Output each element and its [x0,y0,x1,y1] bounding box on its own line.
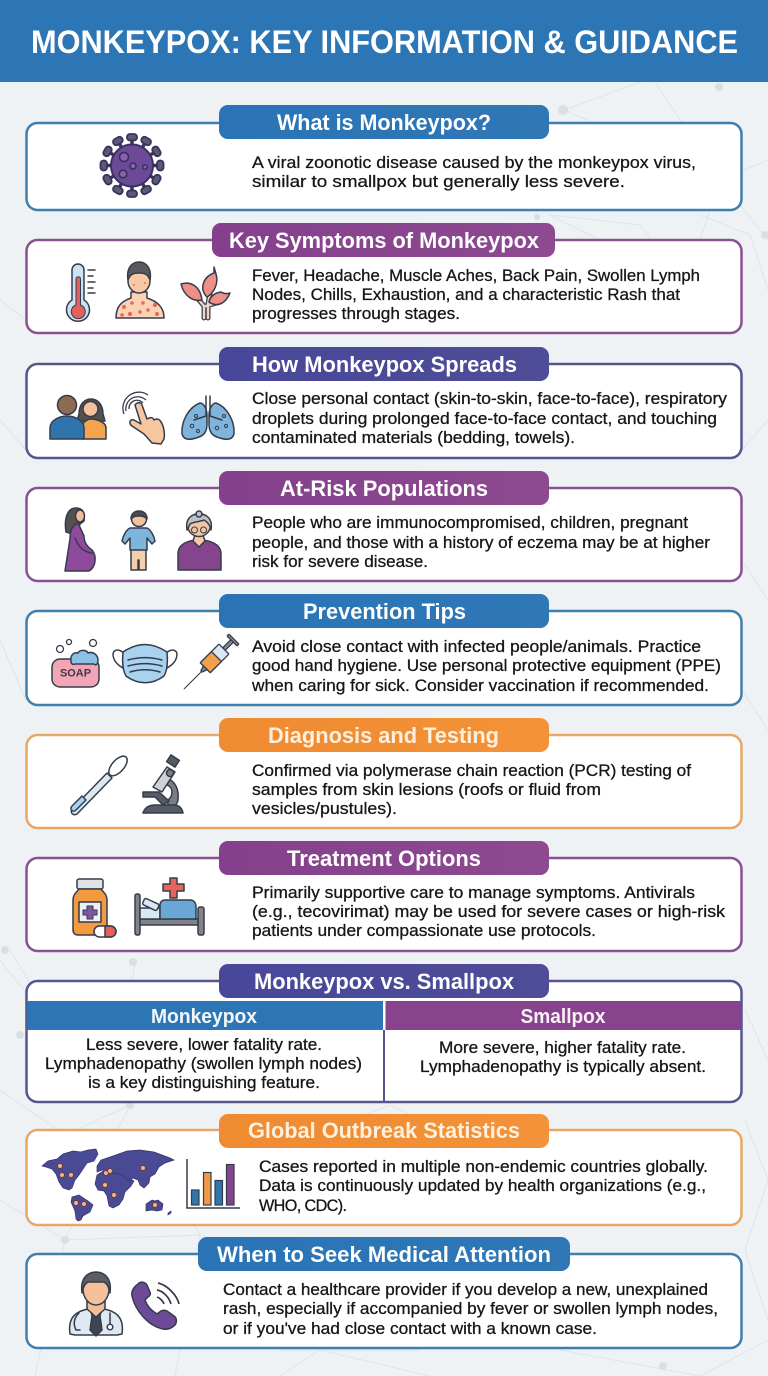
text: symptoms: Nodes, Chills, Exhaustion, and a characteristic Rash that [252,286,681,304]
text: definition: A viral zoonotic disease caused by the monkeypox virus, [252,153,696,172]
text: guidance: rash, especially if accompanied by fever or swollen lymph nodes, [223,1300,718,1318]
heading: prevention tips [219,594,549,628]
heading: how it spreads [219,347,549,381]
column: smallpox: Smallpox [520,1006,606,1028]
text: diagnosis [252,762,692,818]
icon: touching finger [123,392,164,444]
icon: doctor [70,1272,122,1336]
panel: prevention tips [26,594,742,705]
icon: pregnant person [65,508,95,571]
panel: at-risk populations [26,471,742,581]
heading: prevention tips: Prevention Tips [303,599,466,624]
heading: how it spreads: How Monkeypox Spreads [252,352,517,377]
column: smallpox: More severe, higher fatality rate. [439,1039,686,1057]
heading: what is monkeypox [219,105,549,139]
heading: global outbreak statistics [219,1114,549,1148]
icon: elderly person [178,511,221,570]
text: prevention: when caring for sick. Consider vaccination if recommended. [251,677,709,695]
text: statistics: WHO, CDC). [259,1197,347,1215]
heading: treatment options: Treatment Options [287,846,481,871]
text: at-risk groups: People who are immunocompromised, children, pregnant [252,514,689,532]
text: prevention: Avoid close contact with infected people/animals. Practice [252,638,701,656]
icon: test swab [71,753,130,815]
text: prevention: good hand hygiene. Use personal protective equipment (PPE) [252,657,721,675]
icon: virus [100,134,164,197]
icon: phone [132,1282,179,1329]
text: treatment: (e.g., tecovirimat) may be used for severe cases or high-risk [252,903,726,921]
text: treatment [252,884,726,940]
text: guidance [223,1281,718,1338]
text: statistics [259,1158,708,1215]
text: at-risk groups [252,514,711,571]
icon: soap: SOAP [60,668,91,680]
column: smallpox [386,1001,740,1076]
column: monkeypox [28,1001,383,1092]
column: monkeypox: is a key distinguishing feature. [88,1074,320,1092]
text: statistics: Cases reported in multiple non-endemic countries globally. [259,1158,708,1176]
icon: microscope [143,755,183,813]
text: guidance: Contact a healthcare provider if you develop a new, unexplained [223,1281,708,1299]
text: symptoms: Fever, Headache, Muscle Aches, Back Pain, Swollen Lymph [252,267,700,285]
icon: medicine bottle and pill [73,879,116,937]
text: statistics: Data is continuously updated by health organizations (e.g., [259,1177,706,1195]
heading: monkeypox vs smallpox: Monkeypox vs. Smallpox [254,969,515,994]
heading: when to seek medical attention [198,1237,570,1271]
text: symptoms [252,267,700,323]
panel: treatment options [26,841,742,951]
text: prevention [251,638,721,695]
heading: global outbreak statistics: Global Outbreak Statistics [248,1118,520,1143]
column: monkeypox: Monkeypox [151,1006,257,1028]
text: diagnosis: Confirmed via polymerase chain reaction (PCR) testing of [252,762,692,780]
icon: thermometer [67,264,95,321]
heading: key symptoms [212,223,555,257]
text: transmission [252,390,728,447]
text: diagnosis: samples from skin lesions (roofs or fluid from [252,781,601,799]
column: monkeypox: Lymphadenopathy (swollen lymph nodes) [45,1055,362,1073]
heading: treatment options [219,841,549,875]
heading: diagnosis and testing [219,718,549,752]
icon: swollen lymph nodes [181,267,230,318]
heading: monkeypox vs smallpox [219,964,549,998]
text: guidance: or if you've had close contact with a known case. [223,1320,597,1338]
icon: face mask [113,644,177,683]
panel: how it spreads [26,347,742,458]
column: monkeypox: Less severe, lower fatality rate. [86,1036,322,1054]
icon: hospital bed [135,878,204,935]
icon: syringe [179,634,239,694]
icon: world map [42,1149,174,1221]
text: at-risk groups: risk for severe disease. [252,553,428,571]
text: diagnosis: vesicles/pustules). [252,800,397,818]
text: transmission: contaminated materials (bedding, towels). [252,429,575,447]
panel: diagnosis and testing [26,718,742,828]
panel: monkeypox vs smallpox comparison [26,964,742,1102]
column: smallpox: Lymphadenopathy is typically absent. [420,1058,706,1076]
title: MONKEYPOX: KEY INFORMATION & GUIDANCE [31,24,738,60]
title banner [0,0,768,82]
icon: soap [52,640,99,687]
text: transmission: Close personal contact (skin-to-skin, face-to-face), respiratory [252,390,728,408]
heading: at-risk populations [219,471,549,505]
text: symptoms: progresses through stages. [252,305,460,323]
panel: global outbreak statistics [26,1114,742,1225]
icon: lungs [182,396,234,439]
heading: when to seek medical attention: When to Seek Medical Attention [217,1242,551,1267]
panel: key symptoms [26,223,742,333]
text: definition [252,153,696,191]
icon: child [122,511,155,570]
heading: diagnosis and testing: Diagnosis and Testing [268,723,499,748]
panel: when to seek medical attention [26,1237,742,1348]
heading: key symptoms: Key Symptoms of Monkeypox [229,228,540,253]
text: treatment: Primarily supportive care to manage symptoms. Antivirals [252,884,695,902]
text: at-risk groups: people, and those with a history of eczema may be at higher [252,534,711,552]
heading: at-risk populations: At-Risk Populations [280,476,488,501]
icon: bar chart [187,1159,240,1208]
panel: what is monkeypox [26,105,742,210]
icon: two people [50,396,106,439]
icon: person with rash [116,262,164,318]
heading: what is monkeypox: What is Monkeypox? [277,110,491,135]
text: definition: similar to smallpox but generally less severe. [252,172,625,191]
text: transmission: droplets during prolonged face-to-face contact, and touching [252,410,717,428]
text: treatment: patients under compassionate use protocols. [252,922,596,940]
